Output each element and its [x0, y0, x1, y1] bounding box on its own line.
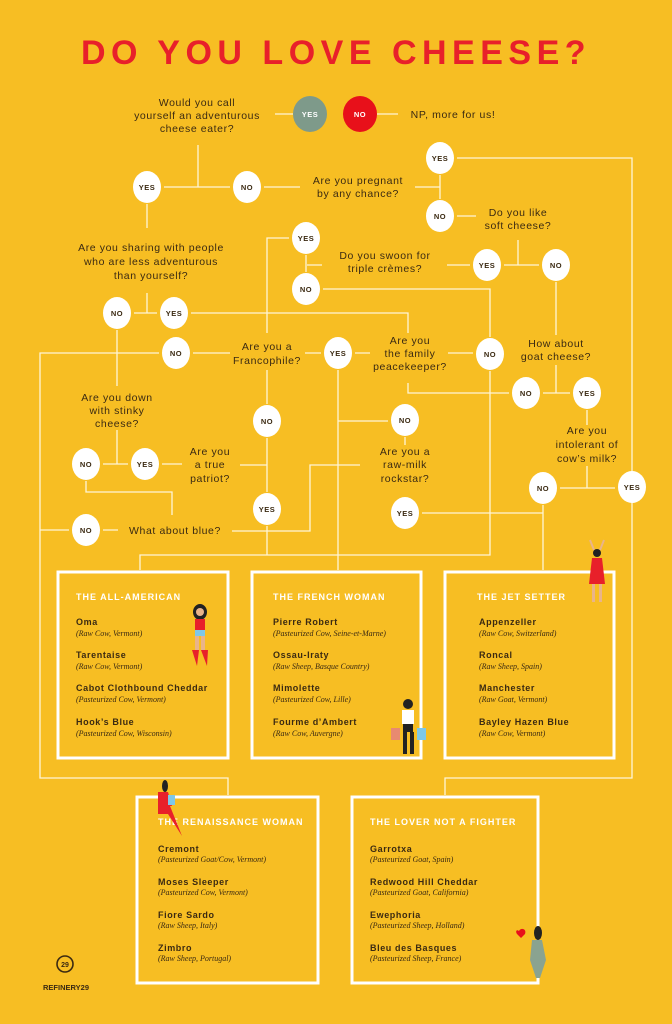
- answer circles: NO: [80, 460, 92, 469]
- panel: renaissance woman: Fiore Sardo: [158, 910, 215, 920]
- panel: renaissance woman: (Raw Sheep, Italy): [158, 921, 218, 930]
- panel: all-american: (Pasteurized Cow, Wisconsin): [76, 729, 172, 738]
- panel: all-american: Oma: [76, 617, 98, 627]
- icon: woman with heart: [516, 926, 546, 978]
- questions: Are you a: [380, 446, 430, 458]
- answer circles: YES: [139, 183, 155, 192]
- questions: [78, 175, 618, 537]
- answer circles: NO: [520, 389, 532, 398]
- yes/no start: [293, 96, 377, 132]
- icon: reading woman: [158, 780, 182, 836]
- questions: How about: [528, 338, 584, 350]
- panel: renaissance woman: [137, 797, 318, 983]
- questions: cheese?: [95, 418, 139, 430]
- questions: a true: [195, 459, 225, 471]
- panel: all-american: (Pasteurized Cow, Vermont): [76, 695, 166, 704]
- questions: What about blue?: [129, 525, 221, 537]
- questions: soft cheese?: [485, 220, 551, 232]
- panel: lover not a fighter: Redwood Hill Cheddar: [370, 877, 478, 887]
- answer circles: NO: [399, 416, 411, 425]
- panel: all-american: (Raw Cow, Vermont): [76, 629, 143, 638]
- panel: french woman: THE FRENCH WOMAN: [273, 592, 386, 602]
- panel: all-american: [58, 572, 228, 758]
- answer circles: NO: [261, 417, 273, 426]
- panel: lover not a fighter: [352, 797, 538, 983]
- questions: goat cheese?: [521, 351, 591, 363]
- answer circles: YES: [397, 509, 413, 518]
- answer circles: YES: [479, 261, 495, 270]
- panel: all-american: Hook’s Blue: [76, 717, 134, 727]
- panel: lover not a fighter: Garrotxa: [370, 844, 413, 854]
- answer circles: NO: [241, 183, 253, 192]
- questions: by any chance?: [317, 188, 399, 200]
- panel: renaissance woman: (Pasteurized Goat/Cow, Vermont): [158, 855, 266, 864]
- questions: Are you pregnant: [313, 175, 403, 187]
- panel: renaissance woman: Cremont: [158, 844, 199, 854]
- questions: Are you a: [242, 341, 292, 353]
- answer circles: NO: [434, 212, 446, 221]
- answer circles: NO: [537, 484, 549, 493]
- questions: with stinky: [88, 405, 145, 417]
- panel: jet setter: (Raw Sheep, Spain): [479, 662, 542, 671]
- questions: Do you like: [489, 207, 547, 219]
- questions: the family: [385, 348, 436, 360]
- panel: lover not a fighter: (Pasteurized Sheep, France): [370, 954, 462, 963]
- text: NP more for us: NP, more for us!: [411, 109, 495, 121]
- icon: shopping woman: [391, 699, 426, 754]
- panel: french woman: (Raw Cow, Auvergne): [273, 729, 343, 738]
- panel: all-american: Tarentaise: [76, 650, 126, 660]
- questions: cow’s milk?: [557, 453, 617, 465]
- questions: than yourself?: [114, 270, 188, 282]
- panel: jet setter: Appenzeller: [479, 617, 537, 627]
- questions: rockstar?: [381, 473, 429, 485]
- questions: Are you sharing with people: [78, 242, 224, 254]
- answer circles: YES: [330, 349, 346, 358]
- questions: peacekeeper?: [373, 361, 447, 373]
- yes/no start: NO: [354, 110, 366, 119]
- questions: who are less adventurous: [83, 256, 218, 268]
- question: adventurous: cheese eater?: [160, 123, 234, 135]
- answer circles: YES: [579, 389, 595, 398]
- answer circles: YES: [624, 483, 640, 492]
- logo: refinery29: REFINERY29: [43, 983, 89, 992]
- questions: Are you: [390, 335, 430, 347]
- questions: patriot?: [190, 473, 230, 485]
- questions: Are you: [567, 425, 607, 437]
- answer circles: NO: [300, 285, 312, 294]
- panel: all-american: (Raw Cow, Vermont): [76, 662, 143, 671]
- icon: dancing woman: [589, 540, 605, 602]
- panel: jet setter: (Raw Cow, Switzerland): [479, 629, 557, 638]
- questions: intolerant of: [556, 439, 618, 451]
- answer circles: NO: [111, 309, 123, 318]
- panel: renaissance woman: Zimbro: [158, 943, 192, 953]
- panel: french woman: Mimolette: [273, 683, 320, 693]
- panel: all-american: THE ALL-AMERICAN: [76, 592, 181, 602]
- questions: triple crèmes?: [348, 263, 422, 275]
- question: adventurous: [134, 97, 260, 135]
- answer circles: YES: [137, 460, 153, 469]
- panel: lover not a fighter: THE LOVER NOT A FIGHTER: [370, 817, 516, 827]
- answer circles: NO: [484, 350, 496, 359]
- panel: jet setter: (Raw Goat, Vermont): [479, 695, 548, 704]
- panel: lover not a fighter: Ewephoria: [370, 910, 421, 920]
- panel: jet setter: [445, 572, 614, 758]
- panel: french woman: (Pasteurized Cow, Seine-et-Marne): [273, 629, 386, 638]
- panel: lover not a fighter: (Pasteurized Goat, California): [370, 888, 469, 897]
- panel: renaissance woman: (Pasteurized Cow, Vermont): [158, 888, 248, 897]
- panel: renaissance woman: (Raw Sheep, Portugal): [158, 954, 231, 963]
- answer circles: YES: [166, 309, 182, 318]
- panel: jet setter: (Raw Cow, Vermont): [479, 729, 546, 738]
- answer circles: YES: [298, 234, 314, 243]
- panel: all-american: Cabot Clothbound Cheddar: [76, 683, 208, 693]
- panel: jet setter: Bayley Hazen Blue: [479, 717, 569, 727]
- panel: french woman: (Raw Sheep, Basque Country): [273, 662, 370, 671]
- answer circles: NO: [170, 349, 182, 358]
- panel: renaissance woman: THE RENAISSANCE WOMAN: [158, 817, 304, 827]
- panel: french woman: Pierre Robert: [273, 617, 338, 627]
- question: adventurous: yourself an adventurous: [134, 110, 260, 122]
- panel: jet setter: Roncal: [479, 650, 513, 660]
- title: DO YOU LOVE CHEESE?: [81, 34, 591, 72]
- questions: Do you swoon for: [339, 250, 431, 262]
- answer circles: [72, 142, 646, 546]
- icon: superhero woman: [192, 604, 208, 666]
- answer circles: NO: [550, 261, 562, 270]
- yes/no start: YES: [302, 110, 318, 119]
- panel: lover not a fighter: Bleu des Basques: [370, 943, 457, 953]
- connector lines: [40, 114, 632, 795]
- panel: french woman: Fourme d’Ambert: [273, 717, 357, 727]
- answer circles: YES: [432, 154, 448, 163]
- panel: jet setter: THE JET SETTER: [477, 592, 566, 602]
- answer circles: YES: [259, 505, 275, 514]
- questions: Francophile?: [233, 355, 301, 367]
- questions: Are you: [190, 446, 230, 458]
- questions: raw-milk: [383, 459, 427, 471]
- panel: lover not a fighter: (Pasteurized Goat, Spain): [370, 855, 454, 864]
- answer circles: NO: [80, 526, 92, 535]
- question: adventurous: Would you call: [159, 97, 235, 109]
- panel: renaissance woman: Moses Sleeper: [158, 877, 229, 887]
- panel: french woman: Ossau-Iraty: [273, 650, 329, 660]
- logo: refinery29: 29: [61, 962, 69, 969]
- panel: lover not a fighter: (Pasteurized Sheep, Holland): [370, 921, 465, 930]
- panel: french woman: (Pasteurized Cow, Lille): [273, 695, 351, 704]
- panel: french woman: [252, 572, 421, 758]
- panel: jet setter: Manchester: [479, 683, 535, 693]
- logo: refinery29: [43, 956, 89, 992]
- questions: Are you down: [81, 392, 153, 404]
